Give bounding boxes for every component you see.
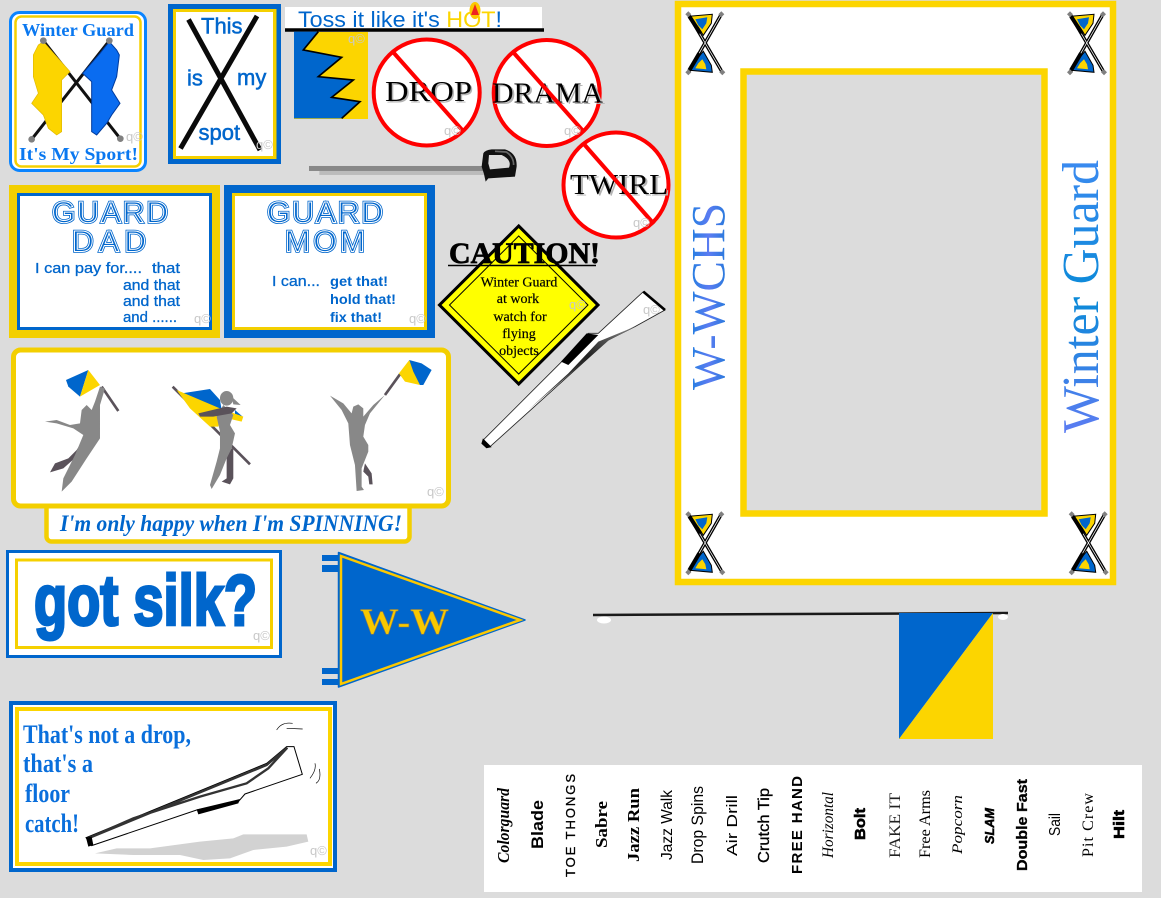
icon: no DROP sign: q© [444, 123, 461, 138]
panel: Guard Dad [9, 185, 220, 338]
word: Popcorn: Popcorn [950, 795, 966, 855]
panel: This is my spot: q© [256, 137, 273, 152]
icon: rifle handle [482, 292, 665, 447]
panel: got silk: got silk? [34, 562, 257, 641]
word: Horizontal: Horizontal [820, 791, 837, 859]
word: Slam: SLAM [982, 807, 997, 844]
icon: corner crossed flags top right [1067, 11, 1107, 75]
heading: Guard Dad [52, 196, 168, 258]
slogan: floor [25, 779, 70, 808]
dancer two [173, 387, 250, 489]
slogan words: my [237, 65, 266, 90]
panel: got silk: q© [253, 628, 270, 643]
icon: no DRAMA sign: DRAMA [492, 78, 603, 110]
slogan words: is [187, 66, 203, 90]
heading: Guard Dad: DAD [72, 226, 146, 258]
icon: no DROP sign [374, 40, 480, 146]
body text: that [152, 260, 181, 277]
heading: Guard Mom [267, 196, 383, 258]
icon: no DRAMA sign [492, 40, 605, 146]
panel: spinning dancers [14, 350, 448, 506]
heading: Guard Mom: MOM [285, 226, 365, 258]
word: Colorguard: Colorguard [494, 788, 513, 863]
sign text: objects [499, 344, 539, 359]
panel: This is my spot [168, 4, 281, 164]
panel: photo frame with W-WCHS and Winter Guard [678, 4, 1113, 582]
heading: Guard Mom: MOM [285, 226, 365, 258]
graphic: blue and yellow zigzag flag [294, 31, 368, 119]
word: Air Drill: Air Drill [724, 795, 741, 856]
panel: Winter Guard It's My Sport patch: q© [126, 129, 143, 144]
body text: get that! [330, 273, 388, 289]
body text: hold that! [330, 291, 396, 307]
body text: and that [123, 293, 181, 310]
heading: Toss it like it's HOT [285, 2, 544, 32]
word: Jazz Walk: Jazz Walk [659, 789, 676, 860]
word: Free Hand: FREE HAND [789, 776, 806, 874]
icon: flame [470, 2, 480, 19]
word: Fake It: FAKE IT [887, 793, 904, 858]
icon: W-W pennant: W-W [360, 602, 449, 643]
panel: spinning dancers: q© [427, 484, 444, 499]
word: Toe Thongs: TOE THONGS [563, 774, 578, 877]
panel: got silk [8, 552, 280, 656]
word: Blade: Blade [528, 800, 547, 849]
body text: I can pay for.... [35, 260, 142, 277]
panel: colorguard vocabulary list [484, 765, 1142, 892]
panel: caption I'm only happy when I'm SPINNING [46, 500, 410, 542]
icon: no DRAMA sign: DRAMA [494, 79, 605, 111]
body text [35, 260, 181, 326]
icon: corner crossed flags top left [685, 11, 725, 75]
word: Pit Crew: Pit Crew [1080, 793, 1097, 857]
icon: no DROP sign: DROP [385, 76, 472, 108]
word: Bolt: Bolt [852, 808, 869, 840]
sign text: at work [497, 292, 539, 307]
crossed flags icon [28, 37, 124, 143]
heading: Guard Mom: GUARD [267, 196, 383, 230]
icon: caution diamond sign: q© [569, 297, 586, 312]
slogan: that's a [23, 749, 93, 778]
body text: I can... [272, 273, 320, 290]
dancer three [330, 360, 432, 491]
patch caption: It's My Sport! [19, 144, 138, 164]
panel: Guard Mom: q© [409, 311, 426, 326]
icon: no DRAMA sign: q© [564, 123, 581, 138]
sign text: watch for [493, 310, 547, 325]
icon: corner crossed flags bottom right [1069, 511, 1109, 575]
patch heading: Winter Guard [22, 20, 134, 40]
word: Hilt: Hilt [1111, 810, 1128, 839]
word: Drop Spins: Drop Spins [688, 786, 707, 864]
word: Sabre: Sabre [592, 801, 611, 848]
panel: that's not a drop, that's a floor catch: q© [310, 843, 327, 858]
heading: Guard Mom: GUARD [267, 196, 383, 230]
icon: no TWIRL sign [564, 132, 670, 238]
heading: Toss it like it's HOT: Toss it like it's HOT! [298, 7, 502, 32]
graphic: blue and yellow zigzag flag: q© [348, 31, 365, 46]
icon: no TWIRL sign: q© [633, 215, 650, 230]
panel: Winter Guard It's My Sport patch [10, 12, 146, 170]
slogan: catch! [25, 809, 79, 838]
heading: Guard Dad: GUARD [52, 196, 168, 230]
text: q© [643, 302, 660, 317]
icon: no DROP sign: DROP [386, 78, 474, 110]
side text: W-WCHS: W-WCHS [682, 203, 736, 390]
heading: Guard Dad: GUARD [52, 196, 168, 230]
panel: that's not a drop, that's a floor catch [11, 703, 335, 870]
panel: caption I'm only happy when I'm SPINNING: I'm only happy when I'm SPINNING! [59, 511, 402, 536]
word: Double Fast: Double Fast [1014, 779, 1031, 871]
body text: and ...... [123, 309, 177, 326]
sign text [481, 276, 557, 359]
icon: dropped rifle [86, 723, 320, 860]
word: Free Arms: Free Arms [917, 790, 934, 858]
icon: no TWIRL sign: TWIRL [572, 170, 670, 202]
slogan [23, 720, 191, 838]
icon: large flag on pole [593, 613, 1008, 739]
panel: Guard Mom [224, 185, 435, 338]
body text: and that [123, 277, 181, 294]
heading: Guard Dad: DAD [72, 226, 146, 258]
slogan words [187, 14, 266, 145]
sign text: Winter Guard [481, 276, 557, 290]
slogan words: spot [198, 120, 240, 145]
sign text: flying [502, 327, 536, 342]
panel: Guard Dad: q© [194, 311, 211, 326]
word: Jazz Run: Jazz Run [624, 787, 643, 862]
icon: W-W pennant [322, 552, 525, 687]
word: Sail: Sail [1047, 813, 1064, 836]
icon: caution diamond sign [440, 226, 598, 384]
body text [272, 273, 396, 325]
slogan: That's not a drop, [23, 720, 191, 749]
side text: Winter Guard: Winter Guard [1053, 160, 1110, 433]
body text: fix that! [330, 309, 382, 325]
slogan words: This [201, 14, 243, 38]
icon: corner crossed flags bottom left [685, 511, 725, 575]
icon: no TWIRL sign: TWIRL [570, 169, 668, 201]
icon: sabre [309, 149, 517, 182]
word: Crutch Tip: Crutch Tip [756, 788, 773, 863]
dancer one [45, 370, 118, 492]
heading: CAUTION: CAUTION! [449, 237, 600, 270]
